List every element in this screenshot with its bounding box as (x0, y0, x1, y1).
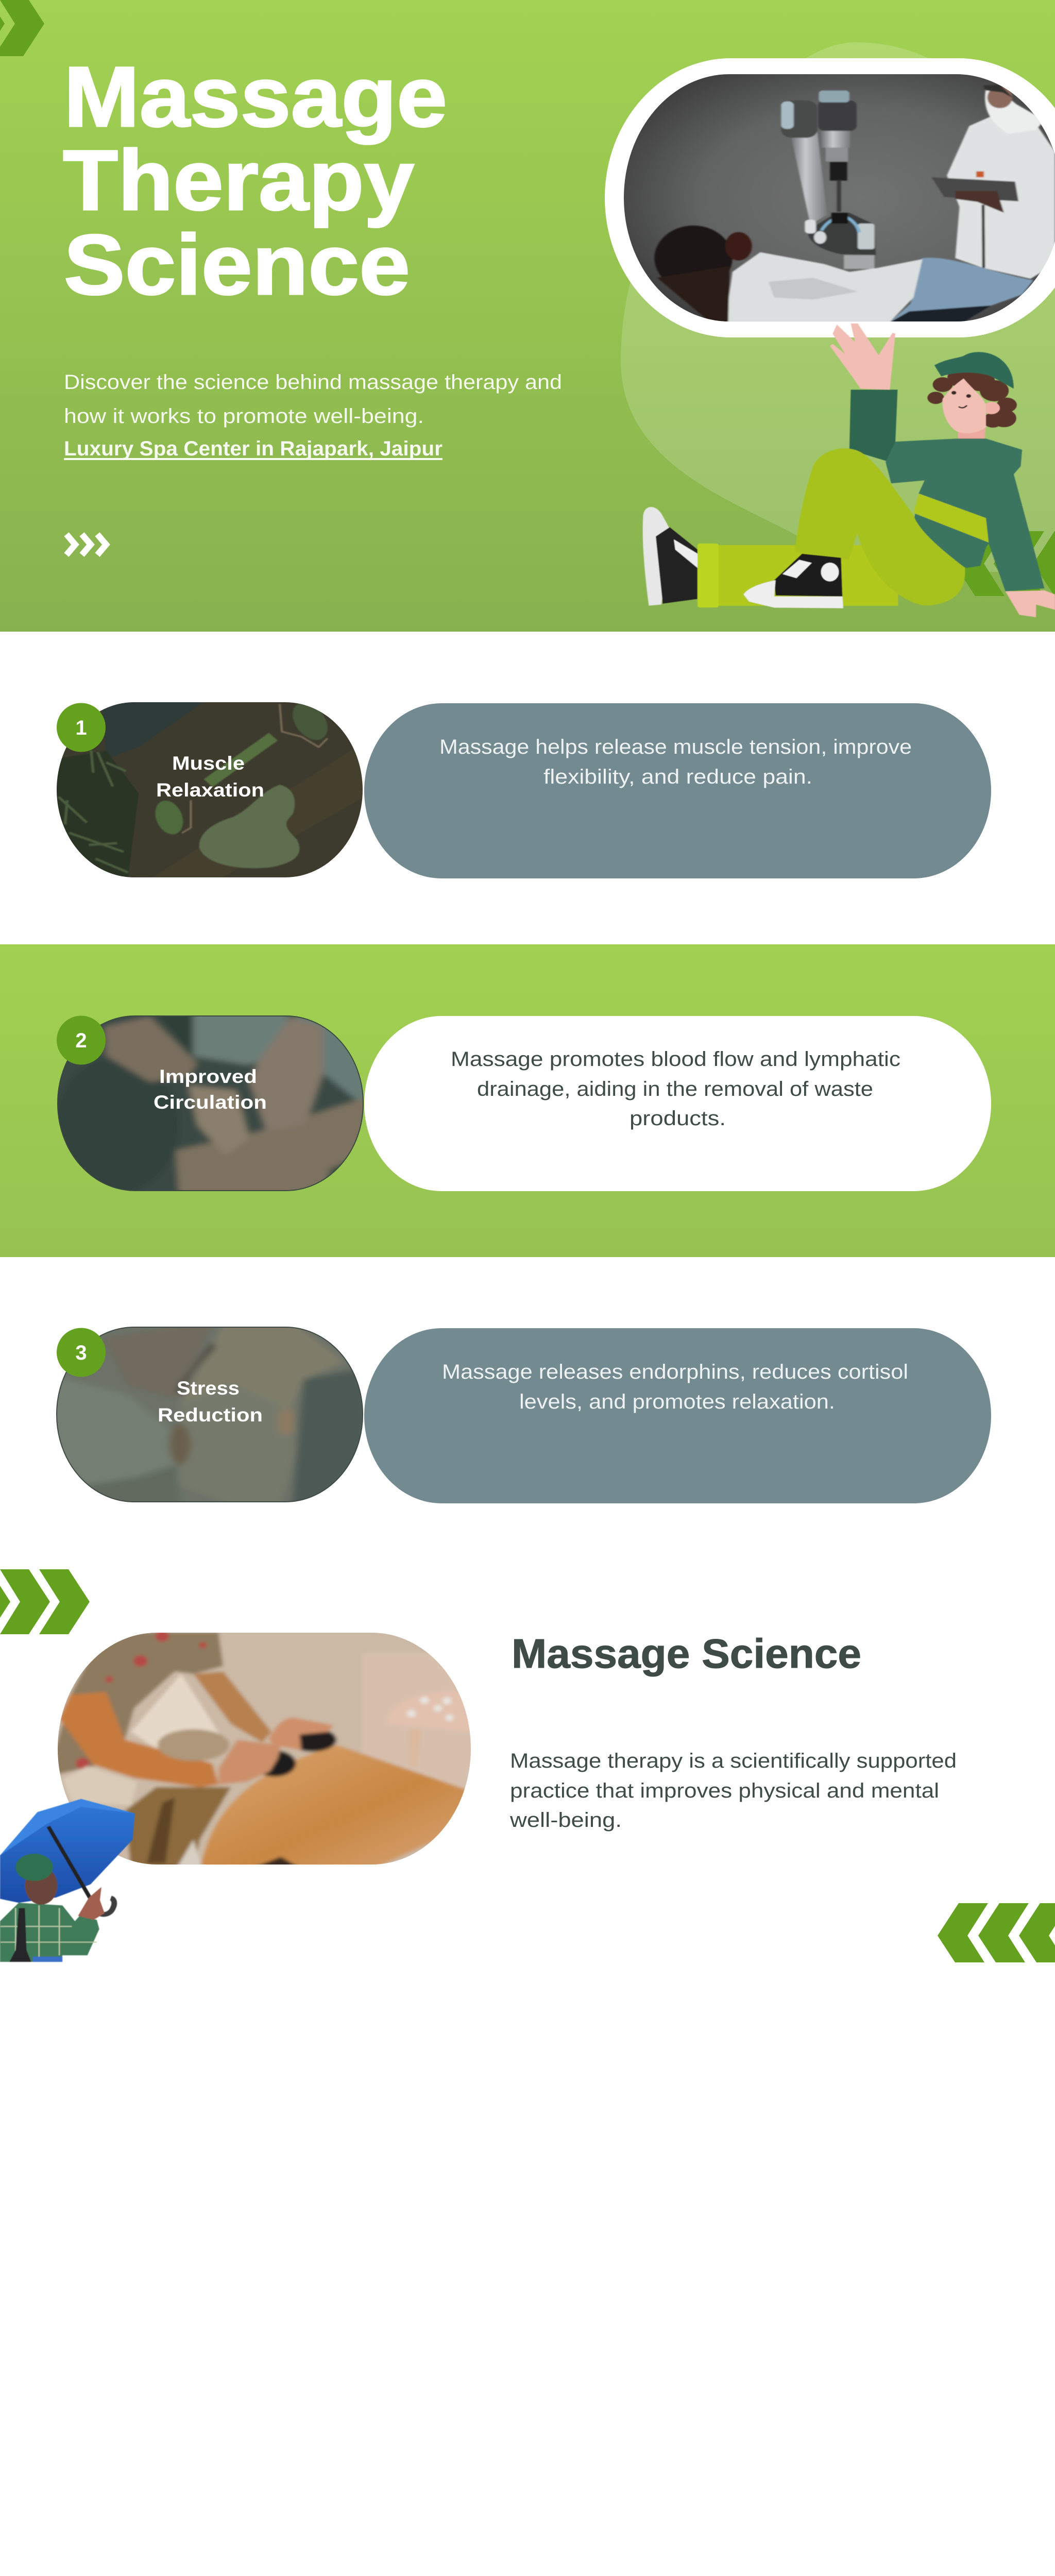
top-left chevrons (0, 0, 44, 56)
hero title: Science (64, 217, 410, 313)
beanie (15, 1854, 53, 1881)
hero panel (0, 0, 1055, 632)
description card: endorphins: levels, and promotes relaxation. (519, 1391, 835, 1413)
patient hair (654, 226, 733, 291)
massage science section (0, 1569, 1055, 1962)
hero link: Luxury Spa Center in Rajapark, Jaipur (64, 437, 443, 460)
description card: muscle tension: Massage helps release muscle tension, improve (439, 736, 912, 758)
paragraph: Massage therapy is a scientifically supported (510, 1750, 957, 1772)
label: Improved Circulation: Circulation (154, 1092, 267, 1113)
label: Muscle Relaxation (156, 753, 264, 801)
technician in white coat (947, 116, 1055, 279)
hero title: Therapy (63, 133, 414, 228)
label: Improved Circulation: Improved (159, 1066, 257, 1087)
straight leg (697, 545, 898, 606)
paragraph: practice that improves physical and mental (510, 1780, 939, 1802)
label: Stress Reduction: Stress (177, 1378, 240, 1399)
ear (983, 402, 1000, 414)
paragraph (509, 1750, 957, 1832)
left chevrons (0, 1569, 90, 1634)
description card: muscle tension (364, 703, 991, 878)
badge: number 1: 1 (75, 717, 87, 739)
badge: number 2 (57, 1016, 106, 1064)
hair (927, 368, 1017, 428)
hoodie lime band (913, 494, 989, 543)
bent leg (795, 448, 965, 606)
description card: muscle tension: flexibility, and reduce pain. (543, 766, 812, 788)
character: sitting person waving (643, 324, 1055, 617)
face (943, 379, 986, 433)
thumbnail: hands massaging shoulders (58, 1016, 363, 1190)
face (25, 1867, 57, 1905)
right chevrons behind character (954, 531, 1055, 596)
character: man with blue umbrella (0, 1799, 135, 1962)
raised arm sleeve (849, 389, 897, 462)
waving hand (830, 324, 895, 389)
hands (268, 1718, 334, 1750)
umbrella (0, 1799, 135, 1903)
client back (200, 1745, 474, 1871)
label: Stress Reduction (158, 1378, 263, 1426)
client shoulder underside (244, 1857, 306, 1871)
therapist pants (62, 1766, 138, 1805)
badge: number 2: 2 (75, 1029, 87, 1052)
hero background (0, 0, 1055, 632)
photo: hot stone massage (31, 1614, 499, 1882)
neck (958, 423, 986, 444)
description card: blood flow: drainage, aiding in the removal of waste (477, 1078, 873, 1100)
description card: blood flow (364, 1016, 991, 1191)
label: Improved Circulation (154, 1066, 267, 1113)
umbrella handle (94, 1898, 114, 1914)
badge: number 1 (57, 703, 106, 752)
decorative light blob (621, 42, 1055, 572)
lower white sheet (175, 1840, 203, 1871)
left shoe (643, 507, 671, 606)
left hand (1006, 590, 1055, 617)
raised hand (78, 1887, 105, 1920)
hero description: how it works to promote well-being. (64, 405, 424, 428)
shirt (0, 1903, 99, 1962)
hero title: Massage (64, 49, 447, 145)
step 2 band (0, 944, 1055, 1257)
badge: number 3 (57, 1328, 106, 1377)
umbrella shaft (48, 1826, 92, 1902)
description card: endorphins: Massage releases endorphins, reduces cortisol (442, 1361, 908, 1383)
step 3 row (56, 1327, 991, 1503)
bright wall behind client (131, 1674, 225, 1750)
photo: robotic massage arm (624, 74, 1055, 322)
icon: white triple chevron (66, 534, 106, 555)
label: Muscle Relaxation: Relaxation (156, 779, 264, 801)
cap (934, 352, 1014, 388)
thumbnail: hands on back (20, 1297, 403, 1527)
hero description: Discover the science behind massage therapy and (64, 371, 562, 394)
thumbnail: jade roller and gua sha (57, 702, 363, 877)
heading: Massage Science: Massage Science (512, 1631, 861, 1676)
bag strap and bag (9, 1908, 31, 1962)
patient jeans (890, 258, 1033, 322)
paragraph: well-being. (509, 1809, 622, 1832)
hero title (63, 49, 447, 313)
shirt (47, 1632, 223, 1776)
badge: number 3: 3 (75, 1342, 87, 1364)
label: Stress Reduction: Reduction (158, 1404, 263, 1426)
label: Muscle Relaxation: Muscle (172, 753, 245, 774)
therapist arms (59, 1692, 218, 1787)
hero description (64, 371, 562, 428)
green band background (0, 944, 1055, 1257)
second shoe (774, 554, 842, 597)
lamp (387, 1690, 471, 1732)
client hair (158, 1730, 229, 1761)
description card: blood flow: products. (629, 1107, 726, 1130)
hot stones (288, 1728, 336, 1752)
description card: blood flow: Massage promotes blood flow and lymphatic (451, 1048, 900, 1071)
description card: endorphins (364, 1328, 991, 1503)
robot arm (791, 132, 827, 225)
patient shirt (725, 252, 923, 322)
right chevrons (938, 1903, 1055, 1962)
step 1 row (57, 702, 991, 878)
hoodie torso (886, 438, 1044, 591)
photo frame: white stadium (605, 58, 1055, 337)
